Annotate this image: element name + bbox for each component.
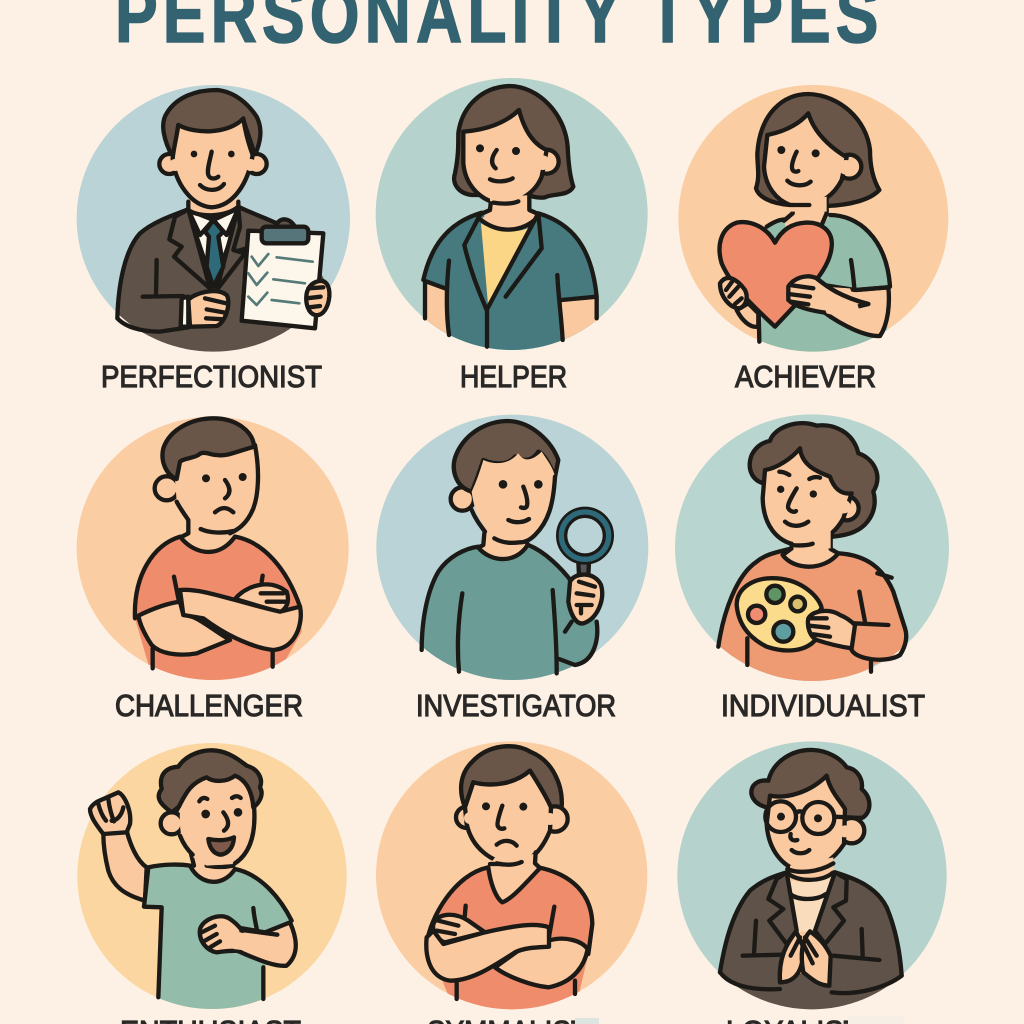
label: helper: HELPER — [460, 359, 567, 394]
icon: hands holding heart — [720, 276, 868, 342]
icon: hand — [568, 575, 602, 623]
neck — [481, 195, 538, 230]
panel: individualist — [675, 414, 949, 723]
panel: achiever — [678, 85, 948, 394]
panel: challenger — [77, 417, 349, 723]
label: investigator: INVESTIGATOR — [416, 688, 616, 723]
label: achiever: ACHIEVER — [735, 359, 876, 394]
icon: hands — [181, 281, 329, 327]
icon: open mouth — [208, 837, 234, 855]
label: challenger: CHALLENGER — [115, 688, 303, 723]
icon: magnifying glass — [558, 508, 612, 576]
panel: enthusiast — [77, 743, 347, 1024]
icon: crossed arms — [426, 915, 588, 987]
icon: crossed arms — [138, 584, 301, 655]
panel: investigator — [376, 415, 648, 723]
panel: helper — [376, 78, 648, 394]
icon: glasses — [765, 801, 862, 834]
panel: loyalist — [677, 741, 947, 1024]
icon: heart — [720, 222, 832, 327]
label: individualist: INDIVIDUALIST — [721, 688, 925, 723]
icon: palette — [737, 578, 822, 650]
lapels — [768, 872, 797, 944]
icon: hand — [808, 611, 855, 648]
label: perfectionist: PERFECTIONIST — [101, 359, 322, 394]
icon: hand and arm — [200, 916, 296, 966]
icon: clasped hands — [780, 931, 831, 986]
panel: perfectionist — [77, 85, 350, 394]
icon: clipboard — [242, 219, 323, 328]
panel: synthesist — [376, 741, 647, 1024]
